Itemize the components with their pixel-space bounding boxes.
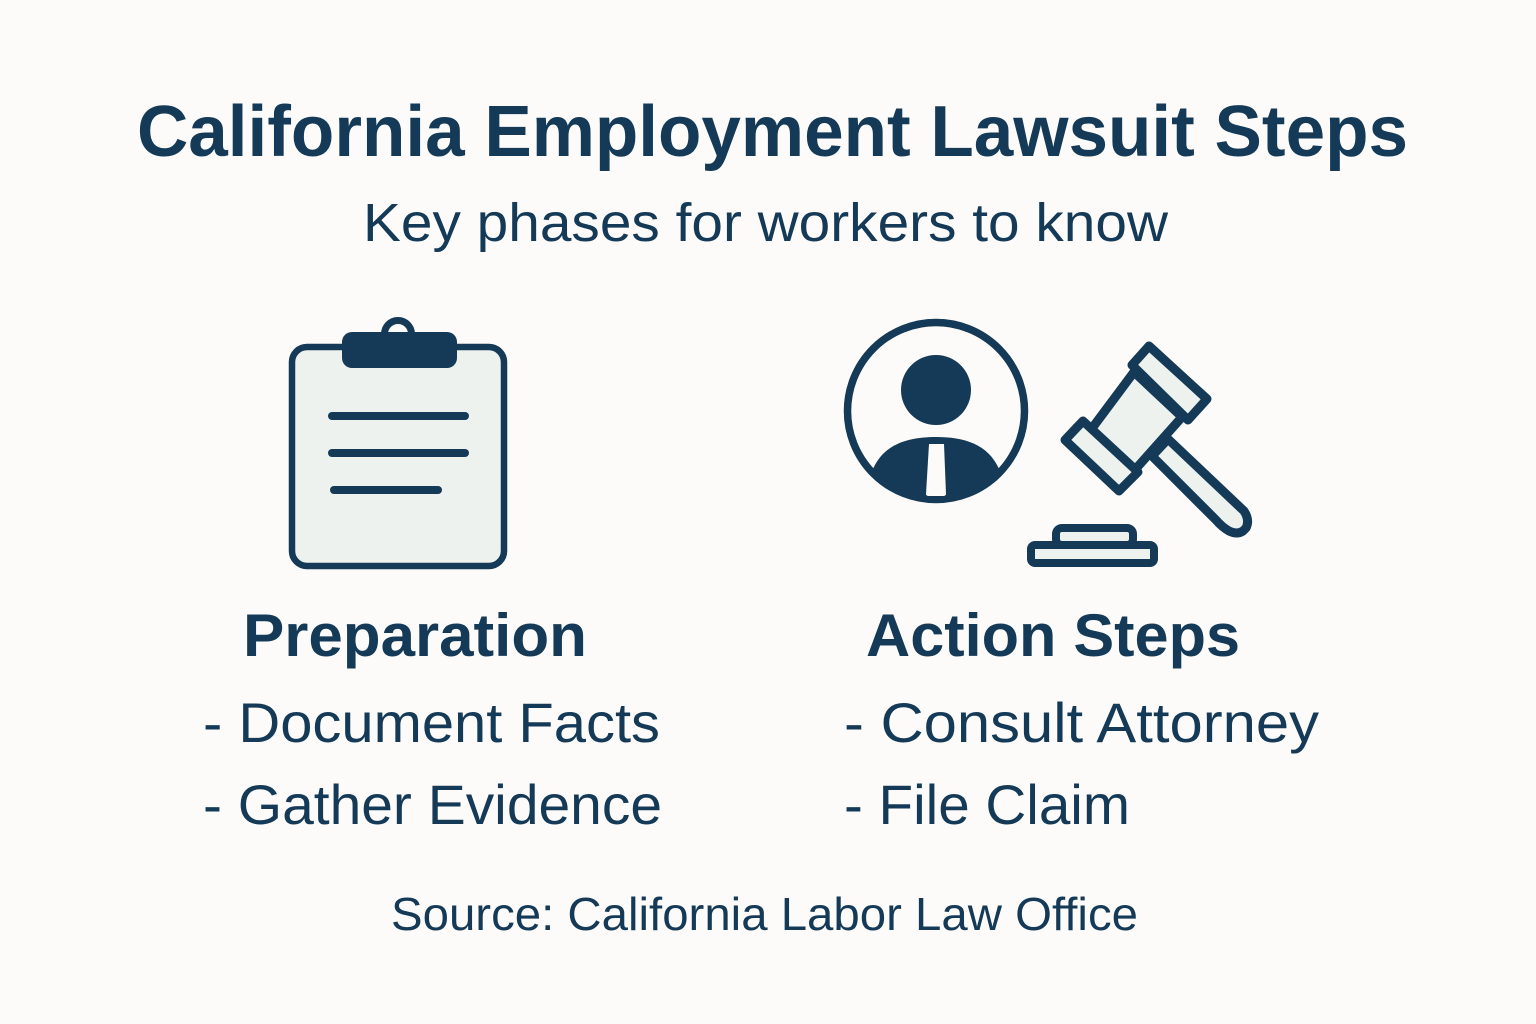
list item: document facts: - Document Facts — [203, 691, 660, 754]
clipboard text lines — [332, 416, 465, 490]
icon: person with tie — [848, 322, 1024, 503]
person shoulders — [873, 437, 999, 503]
person circle outline — [848, 322, 1024, 500]
panel: preparation — [203, 602, 662, 836]
person tie — [926, 444, 946, 496]
source note: Source: California Labor Law Office — [391, 888, 1138, 940]
gavel top cap — [1132, 346, 1207, 420]
panel: action steps — [844, 602, 1319, 836]
title: California Employment Lawsuit Steps — [137, 92, 1408, 172]
list item: gather evidence: - Gather Evidence — [203, 773, 662, 836]
gavel handle — [1152, 439, 1248, 533]
gavel head body — [1090, 372, 1182, 472]
list item: file claim: - File Claim — [844, 773, 1130, 836]
list item: consult attorney: - Consult Attorney — [844, 691, 1319, 754]
heading: preparation: Preparation — [243, 602, 587, 669]
icon: clipboard — [292, 320, 504, 566]
icon: gavel sound block — [1031, 528, 1154, 563]
clipboard clip loop — [384, 320, 412, 348]
person head — [901, 355, 971, 425]
heading: action steps: Action Steps — [866, 602, 1240, 669]
clipboard board — [292, 347, 504, 566]
block base — [1031, 545, 1154, 563]
icon: gavel — [1065, 346, 1248, 533]
subtitle: Key phases for workers to know — [363, 193, 1169, 253]
clipboard clip — [342, 332, 457, 368]
block top — [1056, 528, 1133, 545]
gavel bottom cap — [1065, 421, 1138, 491]
